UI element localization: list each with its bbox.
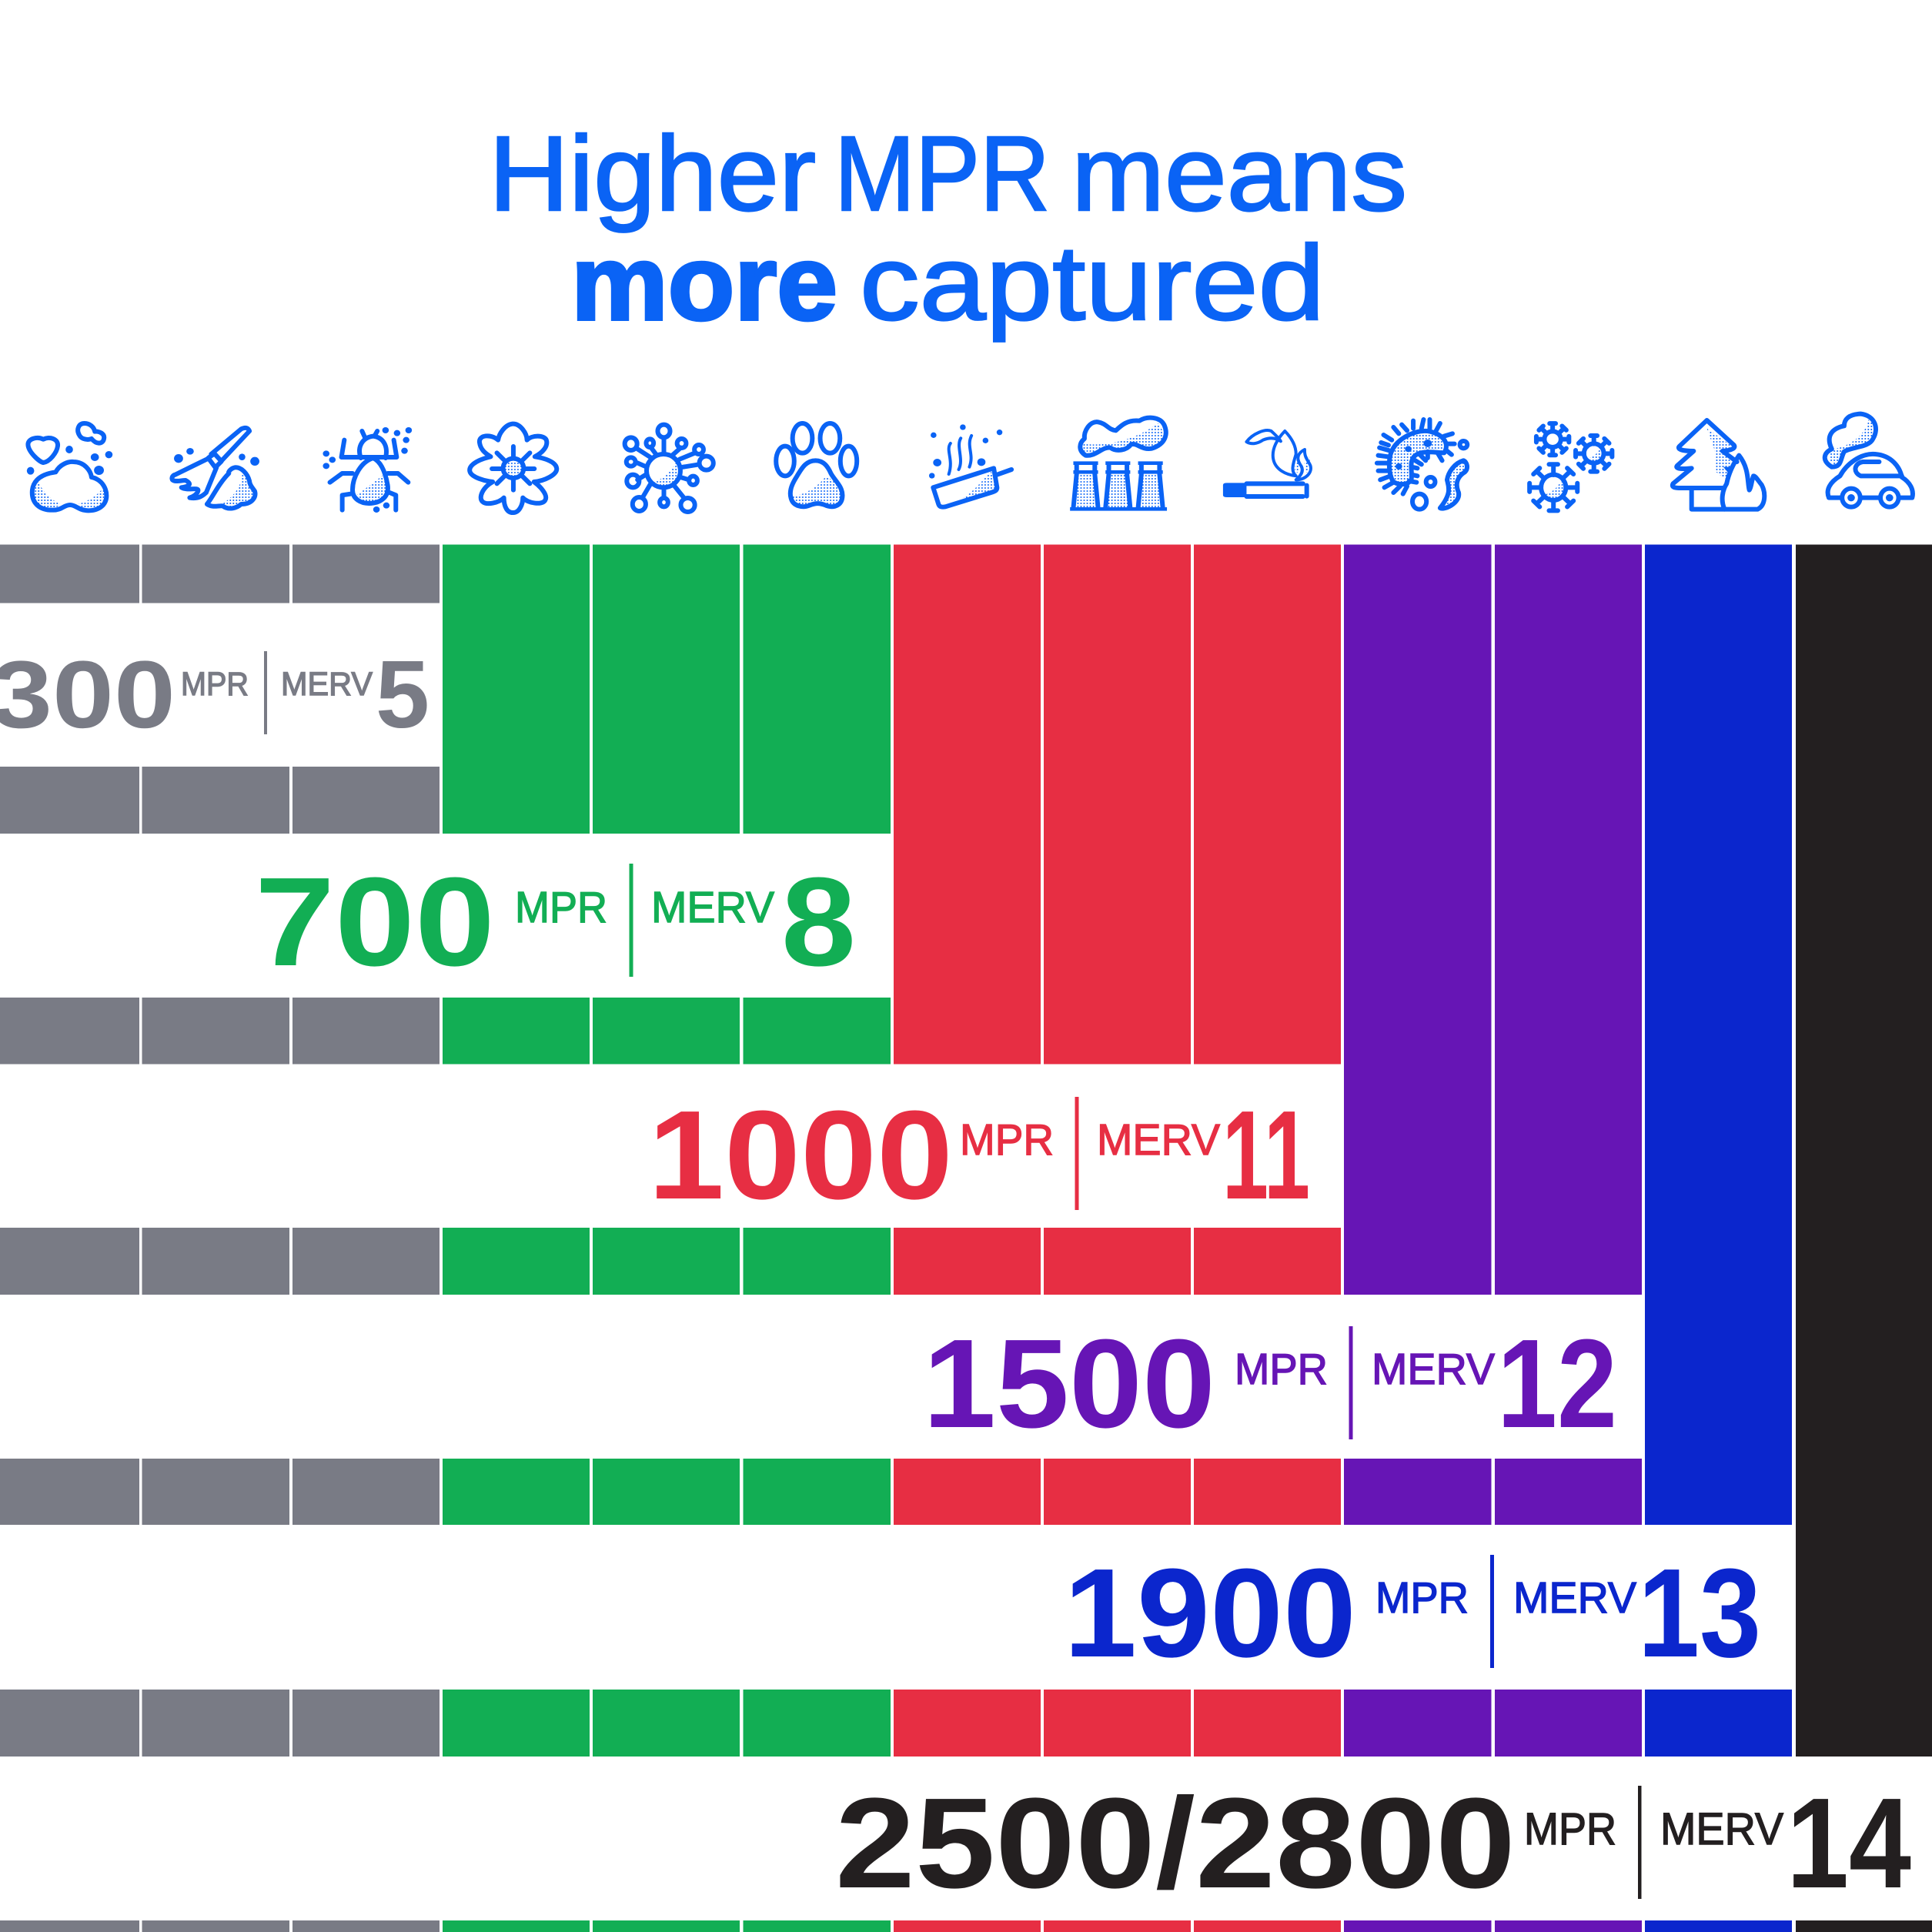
row: MPR 1500 / MERV 12	[0, 1295, 1644, 1459]
icon: three viruses	[1529, 423, 1612, 510]
row: MPR 1000 / MERV 11: 11	[1222, 1085, 1310, 1225]
icon: dust clouds	[27, 423, 112, 510]
row: MPR 1900 / MERV 13: MPR	[1375, 1573, 1469, 1623]
row: MPR 700 / MERV 8: MERV	[651, 883, 774, 932]
row: MPR 1900 / MERV 13: MERV	[1513, 1573, 1636, 1623]
icon: broom and dust	[172, 428, 259, 509]
bars: black MPR 2500/2800 column	[1796, 545, 1932, 1932]
row: MPR 300 / MERV 5: MPR	[181, 666, 249, 703]
row: MPR 1000 / MERV 11	[0, 1064, 1343, 1228]
bars: blue MPR 1900 column	[1645, 545, 1792, 1932]
row: MPR 700 / MERV 8: 8	[781, 851, 856, 992]
row: MPR 300 / MERV 5: MERV	[281, 666, 373, 703]
row: MPR 1500 / MERV 12: MPR	[1235, 1345, 1328, 1394]
bars: red MPR 1000 columns	[894, 545, 1341, 1932]
row: MPR 300 / MERV 5	[0, 603, 442, 767]
title: captured	[860, 224, 1325, 343]
row: MPR 700 / MERV 8: 700	[255, 851, 495, 992]
row: MPR 1000 / MERV 11: MERV	[1097, 1115, 1220, 1165]
row: MPR 1900 / MERV 13	[0, 1525, 1795, 1690]
row: MPR 1900 / MERV 13: 13	[1638, 1543, 1761, 1683]
bars: grey MPR 300 columns	[0, 545, 440, 1932]
icon: cigarette with smoke	[1223, 430, 1311, 497]
icon: car exhaust	[1825, 414, 1913, 507]
title: MPR	[834, 115, 1050, 233]
row: MPR 700 / MERV 8: MPR	[515, 883, 607, 932]
row: MPR 2500/2800 / MERV 14: 2500/2800	[835, 1772, 1516, 1915]
icon: frying pan with steam	[929, 424, 1011, 507]
row: MPR 1500 / MERV 12: MERV	[1372, 1345, 1495, 1394]
title: Higher	[489, 115, 816, 233]
row: MPR 2500/2800 / MERV 14: 14	[1787, 1772, 1911, 1915]
icon: dust mite	[323, 427, 412, 513]
icon: virus molecule	[625, 425, 714, 512]
icon: flower pollen	[470, 424, 557, 513]
row: MPR 2500/2800 / MERV 14: MPR	[1524, 1804, 1616, 1854]
row: MPR 1500 / MERV 12: 1500	[923, 1313, 1215, 1454]
icon: tree and fire	[1673, 420, 1764, 510]
bars: green MPR 700 columns	[443, 545, 891, 1932]
title: more	[571, 224, 837, 343]
icon: paw print	[776, 423, 857, 506]
title	[489, 115, 1407, 343]
row: MPR 1000 / MERV 11: MPR	[960, 1115, 1054, 1165]
title: means	[1071, 115, 1407, 233]
icon: bacteria	[1377, 419, 1467, 510]
row: MPR 700 / MERV 8	[0, 834, 893, 998]
row: MPR 1500 / MERV 12: 12	[1497, 1313, 1617, 1454]
row: MPR 300 / MERV 5: 5	[376, 642, 430, 748]
row: MPR 1000 / MERV 11: 1000	[648, 1085, 953, 1225]
row: MPR 2500/2800 / MERV 14: MERV	[1660, 1804, 1783, 1854]
row: MPR 2500/2800 / MERV 14	[0, 1757, 1932, 1920]
icon: factory smokestacks	[1070, 418, 1167, 511]
bars: purple MPR 1500 columns	[1344, 545, 1642, 1932]
row: MPR 1900 / MERV 13: 1900	[1064, 1543, 1356, 1683]
